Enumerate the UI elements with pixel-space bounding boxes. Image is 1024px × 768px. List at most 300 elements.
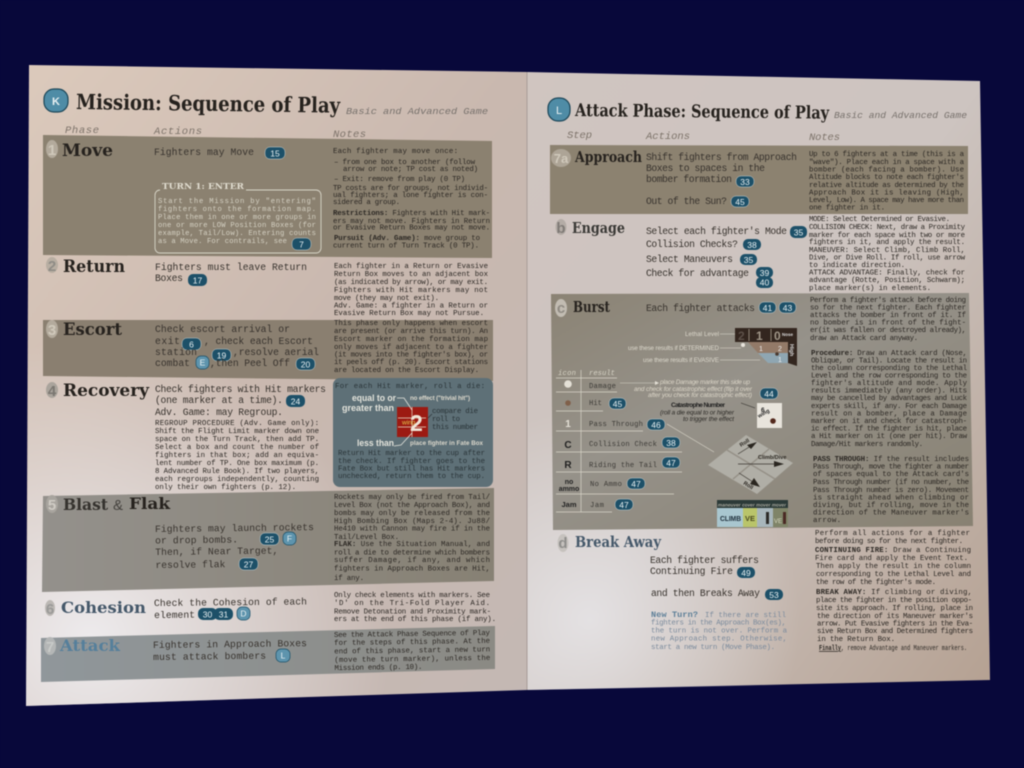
diagram: maneuver diamond: Roll (742, 481, 754, 491)
panel: 7a Approach: 45 (735, 197, 745, 207)
notes: Break Away: Fire card and apply the Event Text. (815, 555, 968, 563)
panel: Hit marker die roll: equal to or (352, 393, 396, 404)
table: icon and result: R (564, 460, 572, 471)
notes: Move: current turn of Turn Track (0 TP). (333, 242, 479, 250)
notes: Cohesion: Remove Detonation and Proximity mark- (334, 608, 491, 616)
notes: Break Away (815, 530, 973, 653)
notes: Break Away: Finally, remove Advantage and Maneuver markers. (819, 645, 967, 653)
text block: Regroup procedure: space on the Turn Track, then add TP. (155, 436, 319, 444)
panel: 3 Escort: 3 (48, 322, 56, 339)
panel: b Engage: Select Maneuvers (646, 254, 733, 265)
panel: 1 Move: Move (62, 141, 113, 161)
notes: Move: Each fighter may move once: (333, 148, 458, 156)
notes: Break Away: arrow. Put Evasive fighters in the Eva- (817, 620, 973, 628)
chart: attack card excerpt: High (788, 344, 794, 357)
table: icon and result: ammo (559, 486, 579, 493)
panel: 5 Blast and Flak: & (113, 497, 123, 514)
text block: Catastrophe Number: (roll a die equal to or higher (660, 410, 735, 416)
panel: 6 Cohesion: 6 (46, 601, 54, 618)
panel: 2 Return: 2 (48, 258, 56, 275)
panel: 7a Approach: Shift fighters from Approach (646, 152, 797, 163)
notes: Burst: of spaces equal to the Attack card's (813, 471, 969, 479)
notes: Blast and Flak: Tail/Level Box. (334, 534, 399, 542)
icon: catastrophe marker: 44 (764, 389, 774, 399)
panel: right page, Attack Phase sequence of play (527, 72, 990, 690)
notes: Burst: draw an Attack card anyway. (810, 335, 918, 343)
panel: 4 Recovery (46, 378, 493, 492)
notes: Attack: end of this phase, start a new turn (334, 646, 490, 656)
column headers: Step (567, 130, 592, 142)
notes: Move: Restrictions: Fighters with Hit mark- (333, 210, 490, 218)
notes: Burst: Perform a fighter's attack before doing (810, 297, 966, 305)
notes: Engage: MODE: Select Determined or Evasive. (809, 216, 950, 224)
text block: Damage marker note: place Damage marker this side up (659, 379, 750, 386)
panel: 5 Blast and Flak: Fighters may launch rockets (155, 522, 314, 535)
notes: Cohesion: Only check elements with markers. See (334, 592, 490, 600)
notes: Approach: bomber (each facing a bomber). Use (809, 166, 964, 174)
notes: Return: Adv. Game: a fighter in a Return or (334, 302, 488, 310)
notes: Burst: results immediately (any order). Hits (811, 388, 967, 396)
notes: Break Away: Then apply the result in the column (816, 563, 971, 571)
text block: Regroup procedure: each regroups independently, counting (155, 476, 319, 484)
panel: d Break Away: d (558, 535, 568, 552)
chart: attack card excerpt: 1 (756, 329, 763, 343)
panel: Hit marker die roll: roll to (432, 416, 460, 424)
panel: 2 Return: Return (63, 257, 125, 277)
notes: Move: Pursuit (Adv. Game): move group to (334, 235, 480, 243)
column headers (65, 125, 366, 141)
table: icon and result: 1 (565, 419, 571, 430)
notes: Burst: er(it was fallen or destroyed already), (810, 327, 966, 335)
panel: 7a Approach: 7a (554, 151, 569, 166)
icon: red wing 2 marker (397, 407, 428, 437)
text block: Regroup procedure: lent number of TP. One box maximum (p. (155, 460, 319, 468)
notes: Blast and Flak: He410 with Cannon may fire if in the (334, 526, 490, 534)
panel: 3 Escort: exit (155, 336, 180, 347)
panel: 7 Attack: Attack (59, 636, 121, 655)
text block: Damage marker note: after you check for catastrophic effect) (648, 392, 752, 399)
notes: Approach: Approach Box it is leaving (High, (809, 190, 964, 198)
panel: 3 Escort: ,resolve aerial (233, 347, 319, 358)
panel: 5 Blast and Flak: 5 (48, 497, 56, 514)
chart: attack card excerpt: 2 (738, 329, 745, 343)
panel: d Break Away: Continuing Fire (650, 566, 733, 577)
notes: Break Away: Perform all actions for a fighter (815, 530, 970, 538)
chart: attack card excerpt (628, 328, 797, 366)
panel: 7 Attack: must attack bombers (153, 651, 266, 663)
notes: Return: Evasive Return Box may not Pursue. (334, 310, 484, 318)
notes: Break Away: CONTINUING FIRE: Draw a Continuing (815, 547, 971, 555)
notes: Burst: fighter's altitude and mode. Apply (811, 380, 968, 388)
panel: 3 Escort: station (155, 347, 197, 358)
notes: Return: Fighters with Hit markers may not (334, 287, 488, 295)
heading: Mission: K (52, 96, 60, 108)
panel: 4 Recovery: 24 (291, 396, 300, 406)
heading: Attack Phase: Attack Phase: Sequence of Play (574, 101, 830, 124)
text block: Regroup procedure: fighters in that box; add an equiva- (155, 452, 319, 460)
label: evasive: use these results if EVASIVE (643, 357, 719, 364)
panel: 7 Attack: L (281, 650, 286, 660)
callout: Turn 1 Enter: fighters onto the formation map. (158, 206, 316, 214)
icon: catastrophe marker (756, 388, 782, 428)
notes: Move: – Exit: remove from play (0 TP) (334, 176, 465, 184)
panel: 6 Cohesion: element (154, 610, 195, 621)
notes: Burst: is straight ahead when climbing or (813, 494, 969, 502)
chart: attack card excerpt: 1 (759, 346, 763, 353)
notes: Move: – from one box to another (follow (334, 159, 476, 167)
panel: 5 Blast and Flak: 25 (265, 534, 274, 544)
table: icon and result: 47 (666, 458, 676, 468)
column headers: Notes (333, 129, 366, 141)
notes: Burst: PASS THROUGH: If the result includes (813, 456, 969, 464)
chart: attack card excerpt: 1 (778, 357, 782, 364)
panel: 2 Return: Fighters must leave Return (155, 262, 307, 273)
panel: 3 Escort: , check each Escort (204, 336, 313, 347)
column headers: Actions (645, 131, 690, 143)
panel: 3 Escort: Check escort arrival or (155, 324, 290, 335)
table: icon and result: 47 (619, 500, 629, 510)
notes: Move: ual fighters; a lone fighter is con- (333, 192, 488, 200)
notes: Move: ers may not move. Fighters in Return (333, 218, 490, 226)
chart: attack card excerpt: 2 (778, 346, 782, 353)
panel: 7a Approach (550, 145, 968, 214)
notes: Escort (334, 320, 488, 375)
panel: d Break Away: 53 (769, 590, 779, 600)
callout: Turn 1 Enter: Place them in one or more groups in (158, 214, 316, 222)
notes: Burst: diving, but if rolling, move in the (813, 502, 969, 510)
panel: b Engage (556, 216, 966, 293)
column headers: Phase (65, 125, 99, 137)
table: icon and result: 38 (666, 438, 676, 448)
icon: red wing 2 marker: wing (401, 420, 416, 426)
notes: Move: arrow or note; TP cost as noted) (343, 166, 478, 174)
panel: c Burst: Each fighter attacks (646, 303, 755, 314)
callout: Turn 1 Enter: TURN 1: ENTER (162, 182, 245, 192)
panel: 3 Escort: ,then Peel Off (210, 358, 290, 369)
text block: Damage marker note (634, 379, 753, 399)
notes: Break Away: the direction of its Maneuver marker's (817, 613, 973, 621)
notes: Engage: advantage (Rotte, Position, Schwarm); (809, 277, 965, 285)
panel: 7a Approach: Boxes to spaces in the (646, 163, 765, 174)
text block: Catastrophe Number: Catastrophe Number (671, 402, 725, 409)
panel: Hit marker die roll: this number (432, 424, 478, 432)
panel: 3 Escort: combat (155, 358, 190, 369)
panel: d Break Away: and then Breaks Away (651, 588, 760, 599)
diagram: maneuver diamond: Roll (739, 438, 751, 449)
panel: 3 Escort: 6 (189, 340, 194, 350)
notes: Burst: ic effect. If the fighter is hit, place (811, 426, 967, 434)
notes: Burst: may be cancelled by advantages and Luck (811, 395, 968, 403)
icon: maneuver marker row (717, 500, 788, 527)
notes: Escort: it peels off (p. 20). Escort stations (334, 359, 488, 367)
heading: Attack Phase (548, 98, 967, 124)
text block: New Turn: start a new turn (Move Phase). (651, 644, 775, 652)
notes: Burst: Oblique, or Tail). Locate the result in (811, 358, 967, 366)
notes: Break Away: corresponding to the Lethal Level and (816, 571, 971, 579)
panel: Hit marker die roll: less than (357, 438, 394, 449)
notes: Break Away: site its approach. If rolling, place in (816, 605, 973, 613)
panel: 5 Blast and Flak: 27 (244, 560, 253, 570)
table: icon and result: Hit (589, 400, 602, 408)
table: icon and result: C (564, 440, 572, 451)
heading: Mission (44, 89, 488, 118)
notes: Blast and Flak: bombs may only be released from the (334, 510, 490, 518)
panel: b Engage: 35 (794, 228, 803, 238)
notes: Escort: (it moves into the fighter's box), or (334, 352, 488, 360)
table: icon and result: 46 (651, 420, 661, 430)
notes: Burst: experts skill, if any. For each Damage (811, 403, 967, 411)
column headers: Actions (153, 126, 202, 138)
table: icon and result: Jam (590, 502, 604, 510)
panel: Hit marker die roll: Fate Box but still has Hit markers (338, 466, 485, 474)
notes: Burst (810, 297, 969, 525)
panel: Hit marker die roll: the check. If fighter goes to the (338, 458, 485, 466)
panel: 6 Cohesion: 31 (219, 610, 228, 620)
notes: Burst: a Hit marker on it (one per hit). Draw (811, 433, 968, 441)
panel: d Break Away: Each fighter suffers (650, 555, 759, 566)
notes: Engage: ATTACK ADVANTAGE: Finally, check for (809, 270, 965, 278)
panel: left page, Mission sequence of play (26, 65, 527, 706)
notes: Break Away: in the Return Box. (817, 636, 895, 644)
notes: Cohesion: 'D' on the Tri-Fold Player Aid. (334, 600, 490, 608)
panel: 7 Attack: Fighters in Approach Boxes (153, 638, 307, 651)
panel: 2 Return: Boxes (155, 273, 183, 284)
text block: Catastrophe Number: to trigger the effect (683, 416, 734, 423)
notes: Move: or Evasive Return Boxes may not move. (333, 224, 490, 232)
panel: 4 Recovery: (one marker at a time). (155, 395, 283, 406)
notes: Engage: MANEUVER: Select Climb, Climb Roll, (809, 247, 965, 255)
text block: New Turn: If there are still (705, 612, 787, 620)
notes: Burst: Pass Through, move the fighter a number (813, 464, 969, 472)
diagram: maneuver diamond (667, 424, 793, 494)
notes: Approach: relative altitude as determined by the (809, 182, 964, 190)
notes: Burst: Pass Through number is zero). Movement (813, 487, 969, 495)
notes: Escort: are located on the Escort Display. (334, 367, 479, 375)
notes: Engage: to indicate direction. (809, 262, 905, 270)
column headers (567, 130, 840, 144)
panel: c Burst: Burst (573, 298, 610, 316)
notes: Attack (334, 630, 491, 673)
panel: 3 Escort: 20 (301, 360, 310, 370)
notes: Blast and Flak: FLAK: Use the Situation Manual, and (334, 541, 490, 549)
table: icon and result (556, 370, 682, 512)
notes: Burst: marker on it and check for catastroph- (811, 418, 967, 426)
notes: Break Away: sive Return Box and Determined fighters (817, 628, 973, 636)
table: icon and result: No Ammo (590, 481, 622, 489)
table: icon and result: no (565, 479, 573, 486)
notes: Escort: Escort marker on the formation map (334, 336, 488, 344)
text block: Regroup procedure: REGROUP PROCEDURE (Adv. Game only): (155, 420, 319, 428)
panel: 1 Move: Fighters may Move (154, 147, 254, 158)
notes: Burst: Procedure: Draw an Attack card (Nose, (811, 350, 967, 358)
icon: maneuver marker row: VE (745, 514, 755, 523)
panel: 5 Blast and Flak: or drop bombs. (155, 534, 238, 546)
panel: 1 Move (43, 135, 492, 258)
notes: Blast and Flak: fighters in Approach Boxes are Hit, (334, 566, 490, 574)
panel: 3 Escort (43, 320, 493, 381)
panel: 6 Cohesion: 30 (203, 610, 212, 620)
table: icon and result: Pass Through (589, 421, 643, 429)
panel: Hit marker die roll: no effect ("trivial hit") (410, 395, 470, 402)
callout: Turn 1 Enter: one or more LOW Position Boxes (for (158, 222, 316, 230)
notes: Cohesion (334, 592, 496, 624)
diagram: maneuver diamond: Climb/Dive (758, 455, 786, 461)
panel: Hit marker die roll: Return Hit marker to the cup after (338, 450, 485, 458)
notes: Blast and Flak (334, 494, 491, 583)
text block: Regroup procedure: 8 Advanced Rule Book). If two players, (155, 468, 319, 476)
notes: Return: Each fighter in a Return or Evasive (334, 263, 488, 271)
chart: attack card excerpt: 0 (774, 329, 781, 343)
panel: 5 Blast and Flak (42, 488, 494, 592)
panel: b Engage: 39 (760, 268, 769, 278)
panel: c Burst: 41 (763, 303, 772, 313)
notes: Attack: for the steps of this phase. At the (334, 638, 490, 648)
notes: Escort: only moves if adjacent to a fighter (334, 344, 488, 352)
column headers: Notes (809, 132, 840, 144)
heading: Attack Phase: Basic and Advanced Game (834, 110, 967, 121)
notes: Move: sidered a group. (333, 199, 400, 207)
table: icon and result: Collision Check (589, 441, 657, 449)
panel: 4 Recovery: Adv. Game: may Regroup. (155, 407, 283, 418)
notes: Engage: marker for each space with two or more (809, 232, 965, 240)
panel: Hit marker die roll: unchecked, return them to the cup. (338, 473, 485, 481)
heading: Mission: Mission: Sequence of Play (76, 89, 341, 118)
table: icon and result: icon (558, 370, 576, 378)
notes: Return: Return Box moves to an adjacent box (334, 271, 489, 279)
panel: b Engage: b (556, 220, 566, 237)
text block: Regroup procedure: Shift the Flight Limit marker down one (155, 428, 319, 436)
panel: Hit marker die roll: compare die (432, 408, 478, 416)
panel: 5 Blast and Flak: F (287, 534, 292, 544)
panel: 3 Escort: Escort (63, 320, 122, 340)
panel: b Engage: Check for advantage (646, 268, 749, 279)
notes: Engage: Dive, or Dive Roll. If roll, use arrow (809, 254, 966, 262)
panel: 1 Move: 15 (270, 148, 280, 158)
notes: Engage: COLLISION CHECK: Next, draw a Proximity (809, 224, 966, 232)
panel: d Break Away (558, 530, 973, 653)
panel: 7a Approach: Out of the Sun? (646, 196, 727, 207)
notes: Escort: This phase only happens when escort (334, 320, 488, 328)
notes: Blast and Flak: suffer Damage, if any, and which (334, 557, 490, 565)
notes: Attack: Mission ends (p. 10). (334, 664, 423, 673)
notes: Attack: See the Attack Phase Sequence of Play (334, 630, 491, 640)
table: icon and result: 47 (631, 479, 641, 489)
text block: New Turn (651, 610, 788, 652)
panel: 7a Approach: bomber formation (646, 174, 732, 185)
heading: Mission: Basic and Advanced Game (346, 106, 488, 117)
notes: Blast and Flak: Level Box (not the Approach Box), and (334, 502, 490, 510)
notes: Approach (809, 151, 965, 212)
table: icon and result: result (589, 370, 615, 378)
panel: d Break Away: Break Away (575, 533, 662, 551)
panel: c Burst (551, 293, 973, 530)
heading: Attack Phase: L (556, 105, 562, 117)
callout: Turn 1 Enter: as a Move. For contrails, see (158, 238, 287, 246)
panel: 3 Escort: E (200, 358, 206, 368)
notes: Escort: are present (or arrive this turn). An (334, 328, 488, 336)
notes: Attack: (move the turn marker), unless the (334, 655, 490, 665)
panel: b Engage: 38 (747, 240, 757, 250)
notes: Approach: Level, Low). A space may have more than (809, 197, 964, 205)
callout: Turn 1 Enter (155, 182, 321, 253)
table: icon and result: Damage (589, 383, 616, 391)
notes: Burst: Damage/Hit markers randomly. (811, 441, 923, 449)
notes: Move (333, 148, 490, 250)
panel: 7 Attack (41, 626, 495, 682)
notes: Return: move (they may not exit). (334, 295, 439, 303)
callout: Turn 1 Enter: 7 (299, 240, 304, 250)
notes: Burst: the column corresponding to the Lethal (811, 365, 968, 373)
icon: maneuver marker row: CLIMB (720, 514, 742, 523)
notes: Engage: fighters in it, and apply the result. (809, 239, 965, 247)
panel: 4 Recovery: Check fighters with Hit markers (155, 384, 326, 395)
text block: Regroup procedure (155, 420, 319, 492)
panel: 7 Attack: 7 (46, 639, 54, 656)
table: icon and result: 45 (613, 399, 622, 409)
panel: 3 Escort: 19 (217, 350, 226, 360)
notes: Burst: arrow. (813, 517, 841, 525)
notes: Burst: attacks the bomber in front of it. If (810, 312, 966, 320)
notes: Break Away: the row of the fighter's mode. (816, 579, 936, 587)
notes: Burst: Level and the row corresponding to the (811, 372, 967, 380)
panel: 4 Recovery: 4 (48, 383, 57, 400)
panel: b Engage: Select each fighter's Mode (646, 226, 787, 237)
notes: Blast and Flak: Rockets may only be fired from Tail/ (334, 494, 491, 502)
text block: Damage marker note: and check for catastrophic effect (flip it over (634, 386, 753, 393)
panel: 4 Recovery: Recovery (63, 381, 150, 401)
text block: New Turn: fighters in the Approach Box(es), (651, 620, 786, 628)
notes: Break Away: place the fighter in the position oppo- (816, 597, 972, 605)
notes: Approach: Altitude blocks to note each fighter's (809, 174, 964, 182)
text block: Regroup procedure: only their own fighters (p. 12). (155, 484, 296, 492)
icon: red wing 2 marker: 2 (410, 410, 423, 436)
text block: New Turn: new Approach step. Otherwise, (651, 636, 787, 644)
notes: Burst: so for the next fighter. Each fighter (810, 304, 966, 312)
panel: 6 Cohesion: Check the Cohesion of each (154, 596, 307, 609)
notes: Burst: Pass Through number (if no number, the (813, 479, 969, 487)
notes: Approach: "wave"). Place each in a space with a (809, 159, 965, 167)
table: icon and result: Riding the Tail (589, 462, 657, 470)
text block: New Turn: New Turn? (651, 610, 698, 620)
panel: Hit marker die roll: For each Hit marker, roll a die: (335, 383, 485, 391)
panel: 1 Move: 1 (48, 142, 56, 159)
panel: c Burst: 43 (783, 303, 792, 313)
panel: 6 Cohesion (45, 592, 496, 624)
panel: 7a Approach: 33 (740, 177, 750, 187)
notes: Break Away: before doing so for the next fighter. (815, 538, 963, 546)
notes: Burst: direction of the Maneuver marker's (813, 510, 969, 518)
label: Lethal Level: Lethal Level (685, 331, 719, 338)
panel: 7a Approach: Approach (574, 148, 642, 166)
panel: Hit marker die roll (333, 378, 493, 487)
chart: attack card excerpt: Nose (782, 332, 794, 337)
notes: Burst: result on a bomber, place a Damage (811, 410, 967, 418)
panel: c Burst: c (557, 300, 565, 317)
label: determined: use these results if DETERMINED (628, 345, 720, 352)
notes: Engage: place marker(s) in elements. (809, 285, 931, 293)
notes: Engage (809, 216, 966, 293)
notes: Approach: Up to 6 fighters at a time (this is a (809, 151, 965, 159)
panel: 2 Return (46, 257, 489, 318)
icon: maneuver marker row: VE (774, 519, 782, 525)
panel: b Engage: Engage (572, 219, 625, 237)
notes: Return: (as indicated by arrow), or may exit. (334, 279, 488, 287)
icon: catastrophe marker: 6 (761, 407, 765, 414)
panel: 5 Blast and Flak: Then, if Near Target, (155, 545, 278, 558)
panel: b Engage: 35 (744, 255, 753, 265)
panel: Hit marker die roll: greater than (342, 403, 394, 414)
icon: catastrophe marker: wing (756, 408, 771, 420)
